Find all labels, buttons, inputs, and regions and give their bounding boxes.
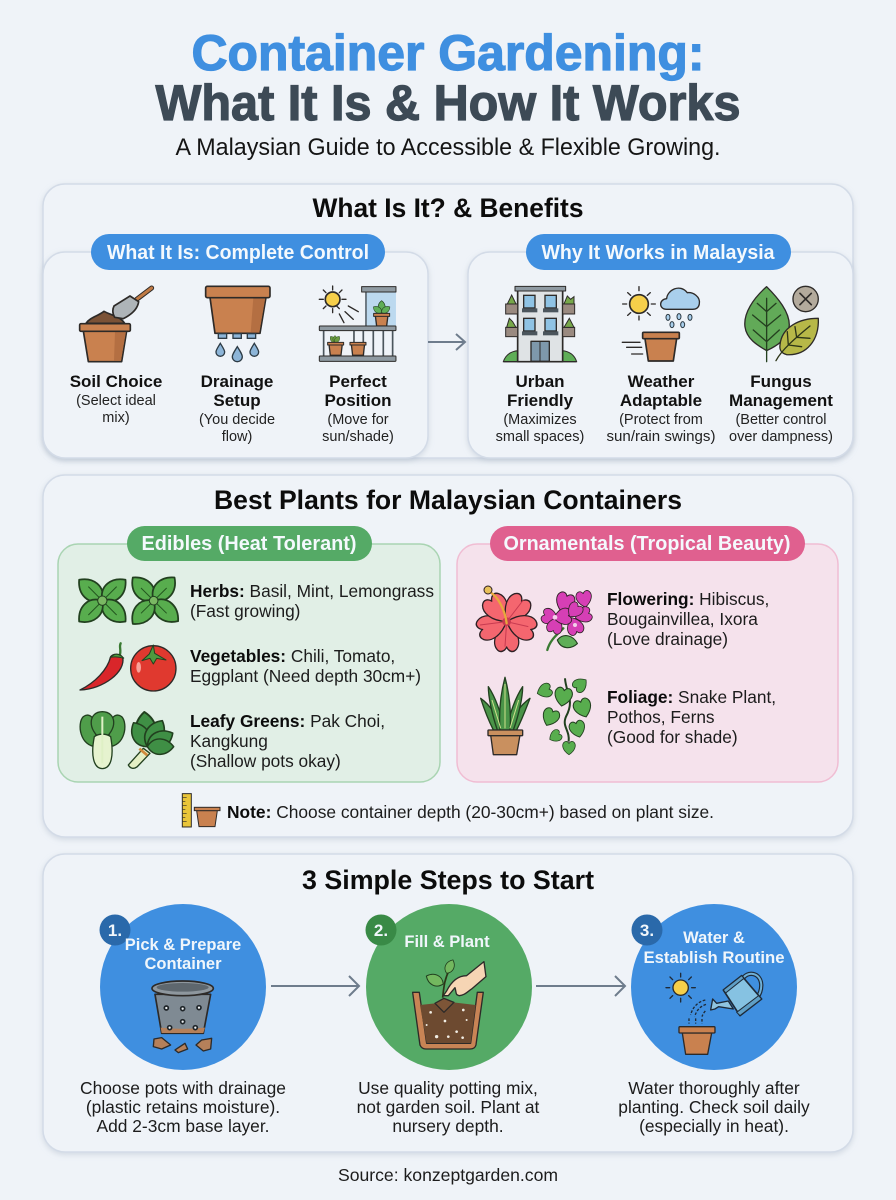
card: ornamentals <box>457 526 838 782</box>
label: fungus management: Management <box>729 391 833 410</box>
step 1 heading: Pick & Prepare <box>125 936 241 954</box>
label: weather adaptable: Adaptable <box>620 391 702 410</box>
text: foliage: Pothos, Ferns <box>607 707 715 727</box>
label: fungus management: Fungus <box>750 372 812 391</box>
label: weather adaptable <box>606 372 716 445</box>
source: Source: konzeptgarden.com <box>338 1165 558 1185</box>
step 1 description: Choose pots with drainage <box>80 1078 286 1098</box>
text: foliage: Foliage: Snake Plant, <box>607 687 776 707</box>
step 1 heading: Container <box>144 955 222 973</box>
label: perfect position: (Move for <box>327 412 389 428</box>
pill: why it works: Why It Works in Malaysia <box>542 242 775 264</box>
icon: sun rain pot <box>622 287 699 361</box>
icon: balcony with sun <box>319 286 396 361</box>
label: soil choice: Soil Choice <box>70 372 162 391</box>
text: vegetables: Vegetables: Chili, Tomato, <box>190 646 395 666</box>
arrow: step 2 to 3 <box>536 976 625 996</box>
heading: what is it: What Is It? & Benefits <box>312 193 584 223</box>
icon: hibiscus and bougainvillea <box>475 586 593 651</box>
icon: drainage pot <box>206 286 270 362</box>
badge 1: 1. <box>108 921 122 940</box>
label: drainage setup: flow) <box>222 429 252 445</box>
text: flowering: (Love drainage) <box>607 629 728 649</box>
text: herbs: (Fast growing) <box>190 601 300 621</box>
text: flowering: Bougainvillea, Ixora <box>607 609 758 629</box>
label: urban friendly: small spaces) <box>496 429 584 445</box>
icon: watering can, sun and pot <box>666 973 762 1054</box>
icon: pak choi and kangkung <box>80 711 177 769</box>
label: urban friendly: Urban <box>515 372 565 391</box>
panel: three steps <box>43 854 853 1152</box>
step 2 description: nursery depth. <box>392 1116 504 1136</box>
badge 3 <box>632 914 662 946</box>
label: fungus management: (Better control <box>735 412 827 428</box>
card: edibles <box>58 526 440 782</box>
badge 2 <box>366 914 396 946</box>
heading: best plants: Best Plants for Malaysian Containers <box>214 485 682 515</box>
title <box>156 25 740 131</box>
label: drainage setup <box>199 372 275 445</box>
icon: healthy leaves and fungus <box>745 286 818 362</box>
badge 1 <box>100 914 130 946</box>
step 3 description <box>618 1078 810 1136</box>
icon: chili and tomato <box>80 643 176 691</box>
label: perfect position <box>322 372 394 445</box>
label: drainage setup: (You decide <box>199 412 275 428</box>
label: perfect position: Perfect <box>329 372 387 391</box>
step 1 heading <box>125 936 241 973</box>
label: urban friendly: (Maximizes <box>503 412 577 428</box>
step 3 heading: Water & <box>683 929 745 947</box>
step 1 circle <box>80 904 286 1136</box>
step 3 heading: Establish Routine <box>644 949 784 967</box>
pill: ornamentals: Ornamentals (Tropical Beauty) <box>504 533 790 555</box>
step 3 circle <box>618 904 810 1136</box>
icon: gray pot with shards <box>152 981 213 1053</box>
arrow: step 1 to 2 <box>271 976 359 996</box>
badge 3: 3. <box>640 921 654 940</box>
step 1 description <box>80 1078 286 1136</box>
icon: basil and mint <box>73 571 184 630</box>
step 2 heading: Fill & Plant <box>404 933 490 951</box>
step 3 description: planting. Check soil daily <box>618 1097 810 1117</box>
step 3 description: (especially in heat). <box>639 1116 789 1136</box>
label: weather adaptable: Weather <box>628 372 695 391</box>
icon: urban building <box>503 286 577 362</box>
text: herbs: Herbs: Basil, Mint, Lemongrass <box>190 581 434 601</box>
label: fungus management: over dampness) <box>729 429 833 445</box>
text: foliage: (Good for shade) <box>607 727 738 747</box>
icon: snake plant and pothos <box>481 675 594 755</box>
sub-panel: why it works <box>468 234 853 458</box>
label: drainage setup: Drainage <box>201 372 273 391</box>
text: leafy greens: Kangkung <box>190 731 268 751</box>
title: Container Gardening: <box>192 25 704 81</box>
step 1 description: Add 2-3cm base layer. <box>96 1116 270 1136</box>
icon: ruler and pot <box>182 794 220 827</box>
title: What It Is & How It Works <box>156 75 740 131</box>
arrow: control to malaysia <box>428 334 465 350</box>
text: vegetables: Eggplant (Need depth 30cm+) <box>190 666 421 686</box>
step 2 description: Use quality potting mix, <box>358 1078 538 1098</box>
subtitle: A Malaysian Guide to Accessible & Flexible Growing. <box>176 134 720 161</box>
label: soil choice <box>70 372 162 426</box>
panel: best plants <box>43 475 853 837</box>
pill: what it is: What It Is: Complete Control <box>107 242 369 264</box>
text: flowering: Flowering: Hibiscus, <box>607 589 769 609</box>
pill: edibles <box>127 526 372 561</box>
step 3 description: Water thoroughly after <box>628 1078 800 1098</box>
text: leafy greens: (Shallow pots okay) <box>190 751 341 771</box>
label: soil choice: (Select ideal <box>76 393 156 409</box>
label: drainage setup: Setup <box>213 391 261 410</box>
step 1 description: (plastic retains moisture). <box>86 1097 280 1117</box>
panel: what is it and benefits <box>43 184 853 458</box>
label: perfect position: Position <box>324 391 392 410</box>
label: soil choice: mix) <box>102 410 130 426</box>
sub-panel: complete control <box>43 234 428 458</box>
badge 2: 2. <box>374 921 388 940</box>
label: fungus management <box>729 372 833 445</box>
pill: why it works <box>526 234 791 270</box>
label: urban friendly: Friendly <box>507 391 574 410</box>
pill: what it is <box>91 234 385 270</box>
icon: planting seedling <box>413 958 486 1049</box>
pill: edibles: Edibles (Heat Tolerant) <box>142 533 356 555</box>
label: urban friendly <box>496 372 584 445</box>
label: perfect position: sun/shade) <box>322 429 394 445</box>
step 3 heading <box>644 929 784 967</box>
pill: ornamentals <box>490 526 805 561</box>
step 2 description <box>357 1078 540 1136</box>
label: weather adaptable: sun/rain swings) <box>606 429 716 445</box>
step 2 description: not garden soil. Plant at <box>357 1097 540 1117</box>
text: leafy greens: Leafy Greens: Pak Choi, <box>190 711 385 731</box>
heading: three steps: 3 Simple Steps to Start <box>302 865 594 895</box>
step 2 circle <box>357 904 540 1136</box>
icon: soil pot with scoop <box>80 288 152 362</box>
note: Note: Choose container depth (20-30cm+) based on plant size. <box>227 802 714 822</box>
label: weather adaptable: (Protect from <box>619 412 703 428</box>
